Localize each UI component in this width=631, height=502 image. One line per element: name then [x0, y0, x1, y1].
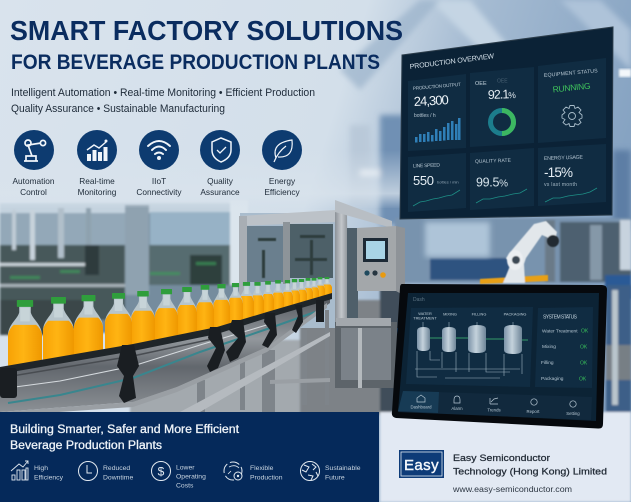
- icon: IIoT connectivity: [139, 130, 179, 170]
- system status panel: Filling: [541, 360, 554, 366]
- banner heading: [10, 424, 240, 452]
- label: automation control: Automation: [13, 176, 55, 186]
- icon: gear: [562, 106, 582, 126]
- benefit: lower operating costs: $: [158, 464, 165, 478]
- process diagram: WATER: [418, 311, 432, 316]
- system status panel: OK: [579, 376, 587, 382]
- benefit: sustainable future: Future: [325, 474, 345, 482]
- benefit: sustainable future: Sustainable: [325, 465, 361, 472]
- navigation bar: Alarm: [451, 406, 463, 411]
- tablet: [392, 284, 607, 429]
- label line: monitoring: Monitoring: [78, 187, 117, 197]
- control panel: [357, 226, 405, 296]
- juice bottles: [8, 277, 332, 369]
- title: [10, 15, 403, 74]
- card: OEE: OEE: [497, 78, 508, 84]
- card: production output: 24,300: [413, 92, 449, 109]
- system status panel: Mixing: [542, 344, 556, 350]
- card: line speed: 550: [413, 173, 434, 188]
- label: energy efficiency: Energy: [269, 176, 296, 186]
- icon: real-time monitoring: [77, 130, 117, 170]
- company name: Easy Semiconductor: [453, 453, 551, 464]
- card: quality rate: 99.5%: [476, 176, 508, 190]
- system status panel: OK: [581, 328, 589, 334]
- label: quality assurance: Quality: [207, 176, 234, 186]
- benefit: lower operating costs: Costs: [176, 482, 194, 490]
- system status panel: OK: [580, 360, 588, 366]
- icon: quality assurance: [200, 130, 240, 170]
- navigation bar: [398, 391, 592, 420]
- mid factory: [0, 200, 631, 335]
- banner heading: Building Smarter, Safer and More Efficient: [10, 424, 240, 436]
- system status panel: OK: [580, 344, 588, 350]
- label: real-time monitoring: Real-time: [79, 176, 115, 186]
- icon: energy efficiency: [262, 130, 302, 170]
- title: FOR BEVERAGE PRODUCTION PLANTS: [11, 51, 380, 74]
- conveyor clamps: [0, 300, 324, 403]
- label line: connectivity: Connectivity: [136, 187, 182, 197]
- system status panel: Packaging: [541, 376, 564, 382]
- card: quality rate: [475, 158, 527, 203]
- card: production output: [413, 82, 461, 142]
- benefit: flexible production: Production: [250, 474, 283, 482]
- card: energy usage: vs last month: [544, 182, 577, 188]
- subtitle: Quality Assurance • Sustainable Manufacturing: [11, 103, 225, 115]
- icon: automation control: [14, 130, 54, 170]
- company logo box: Easy: [404, 457, 439, 474]
- donut chart: [490, 110, 514, 134]
- subtitle: Intelligent Automation • Real-time Monitoring • Efficient Production: [11, 87, 315, 99]
- navigation bar: Report: [527, 409, 540, 414]
- process diagram: [406, 307, 533, 387]
- filling machine: [239, 200, 405, 388]
- card: production output: bottles / h: [414, 113, 436, 119]
- feature icons row: [13, 130, 302, 197]
- card: production output: PRODUCTION OUTPUT: [413, 82, 461, 91]
- benefit: flexible production: Flexible: [250, 465, 274, 472]
- conveyor supports: [180, 310, 330, 412]
- navigation bar: Trends: [487, 408, 501, 412]
- benefit: lower operating costs: Lower: [176, 464, 195, 472]
- banner heading: Beverage Production Plants: [10, 440, 162, 452]
- card: OEE: OEE: [475, 81, 487, 87]
- benefit: lower operating costs: Operating: [176, 474, 206, 480]
- benefit: high efficiency: Efficiency: [34, 474, 64, 482]
- card: line speed: LINE SPEED: [413, 163, 440, 169]
- panel heading: PRODUCTION OVERVIEW: [409, 52, 495, 71]
- label line: efficiency: Efficiency: [264, 187, 301, 197]
- card: equipment status: EQUIPMENT STATUS: [544, 68, 598, 79]
- floor and lower machinery: [130, 285, 631, 502]
- benefit: flexible production: [224, 462, 283, 482]
- conveyor belt: [0, 293, 332, 416]
- process diagram: MIXING: [443, 312, 457, 316]
- navigation bar: Setting: [566, 411, 580, 416]
- benefit: lower operating costs: [152, 462, 206, 490]
- company name: Technology (Hong Kong) Limited: [453, 466, 607, 478]
- card: quality rate: QUALITY RATE: [475, 158, 512, 165]
- card: OEE: 92.1%: [488, 87, 517, 102]
- bottom banner: [0, 412, 379, 502]
- card: energy usage: ENERGY USAGE: [544, 155, 584, 162]
- card: line speed: [413, 163, 460, 206]
- benefit: high efficiency: [11, 461, 64, 482]
- panel: production overview: [400, 27, 613, 219]
- tablet: Dash: [413, 297, 425, 303]
- company name: [453, 453, 607, 478]
- navigation bar: Dashboard: [410, 404, 432, 410]
- benefit: reduced downtime: Downtime: [103, 474, 133, 482]
- label line: assurance: Assurance: [200, 187, 240, 197]
- system status panel: Water Treatment: [542, 328, 578, 334]
- robot arm: [480, 221, 559, 284]
- process diagram: FILLING: [472, 312, 486, 316]
- benefit: high efficiency: High: [34, 465, 48, 472]
- card: energy usage: [544, 155, 597, 202]
- card: equipment status: [544, 68, 598, 126]
- process diagram: TREATMENT: [413, 316, 437, 320]
- title: SMART FACTORY SOLUTIONS: [10, 15, 403, 46]
- label line: control: Control: [20, 187, 47, 197]
- card: line speed: bottles / min: [437, 180, 459, 184]
- system status panel: [535, 307, 593, 388]
- card: equipment status: RUNNING: [552, 81, 591, 94]
- benefit: reduced downtime: Reduced: [103, 465, 130, 472]
- card: energy usage: -15%: [544, 165, 573, 180]
- subtitle: [11, 87, 315, 115]
- card: OEE: [475, 78, 517, 134]
- company website: www.easy-semiconductor.com: [452, 485, 572, 494]
- company logo box: [400, 450, 444, 478]
- process diagram: PACKAGING: [504, 312, 526, 316]
- system status panel: SYSTEM STATUS: [543, 314, 578, 320]
- label: IIoT connectivity: IIoT: [152, 176, 166, 186]
- benefit: sustainable future: [300, 462, 361, 482]
- benefit: reduced downtime: [78, 462, 133, 482]
